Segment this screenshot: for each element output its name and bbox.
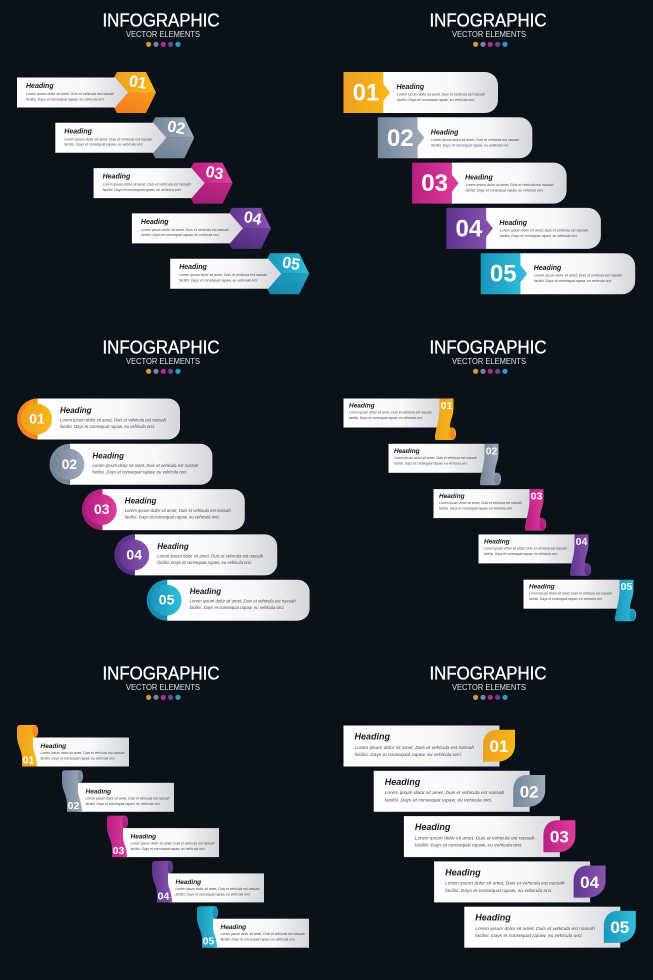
text — [60, 418, 167, 429]
step 04 — [434, 861, 606, 902]
text — [86, 796, 170, 806]
arrow block — [412, 163, 459, 204]
text: facilisi. Days et consequat rapaw, eu vehicula orci. — [103, 188, 182, 192]
text: Lorem ipsum dolor sit amet, Duis et vehicula est nassah — [475, 926, 595, 931]
ribbon — [107, 816, 128, 857]
card — [38, 398, 180, 440]
title: VECTOR ELEMENTS — [126, 29, 200, 39]
heading: Heading — [465, 175, 493, 182]
text: Lorem ipsum dolor sit amet, Duis et vehicula est nassah — [103, 183, 191, 187]
text — [445, 881, 565, 893]
text: Lorem ipsum dolor sit amet, Duis et vehicula est nassah — [176, 887, 260, 891]
card — [167, 580, 310, 621]
text: facilisi. Days et consequat rapaw, eu vehicula orci. — [60, 424, 155, 429]
ribbon — [480, 444, 501, 485]
step 01 — [17, 725, 129, 766]
card — [17, 78, 128, 108]
card — [132, 213, 243, 243]
text: Lorem ipsum dolor sit amet, Duis et vehicula est nassah — [60, 418, 167, 422]
number: 01 — [353, 80, 379, 106]
ribbon — [197, 906, 218, 948]
text: Lorem ipsum dolor sit amet, Duis et vehicula est nassah — [397, 92, 485, 96]
heading: Heading — [130, 834, 156, 841]
card — [417, 117, 532, 158]
text: Lorem ipsum dolor sit amet, Duis et vehicula est nassah — [529, 592, 612, 596]
title: VECTOR ELEMENTS — [452, 682, 526, 692]
heading: Heading — [349, 402, 375, 410]
text: Lorem ipsum dolor sit amet, Duis et vehicula est nassah — [354, 745, 474, 750]
step 05 — [524, 580, 636, 621]
card — [478, 534, 574, 563]
text: facilisi. Days et consequat rapaw, eu vehicula orci. — [500, 234, 578, 238]
text: Lorem ipsum dolor sit amet, Duis et vehicula est nassah — [431, 138, 519, 142]
number: 04 — [580, 873, 600, 892]
text: Lorem ipsum dolor sit amet, Duis et vehicula est nassah — [466, 183, 554, 187]
text: Lorem ipsum dolor sit amet, Duis et vehicula est nassah — [439, 501, 522, 505]
text: Lorem ipsum dolor sit amet, Duis et vehicula est nassah — [125, 508, 231, 513]
number: 01 — [29, 410, 45, 426]
text: Lorem ipsum dolor sit amet, Duis et vehicula est nassah — [130, 842, 214, 846]
text: Lorem ipsum dolor sit amet, Duis et vehicula est nassah — [484, 546, 567, 550]
text: Lorem ipsum dolor sit amet, Duis et vehicula est nassah — [349, 410, 432, 414]
card — [404, 816, 560, 857]
heading: Heading — [103, 174, 131, 181]
text: facilisi. Days et consequat rapaw, eu vehicula orci. — [534, 279, 612, 283]
text: facilisi. Days et consequat rapaw, eu vehicula orci. — [179, 278, 258, 282]
ribbon — [435, 398, 456, 440]
text: Lorem ipsum dolor sit amet, Duis et vehicula est nassah — [220, 932, 304, 936]
text: facilisi. Days et consequat rapaw, eu vehicula orci. — [40, 756, 116, 760]
title: INFOGRAPHIC — [102, 338, 220, 358]
leaf badge — [574, 866, 606, 898]
text: facilisi. Days et consequat rapaw, eu vehicula orci. — [431, 143, 509, 147]
text: Lorem ipsum dolor sit amet, Duis et vehicula est nassah — [500, 228, 588, 232]
text — [500, 228, 588, 238]
ribbon — [17, 725, 38, 766]
text — [439, 501, 522, 511]
text — [475, 926, 595, 938]
text — [26, 92, 114, 101]
step 03 — [404, 816, 575, 857]
text: Lorem ipsum dolor sit amet, Duis et vehicula est nassah — [179, 273, 267, 277]
text: Lorem ipsum dolor sit amet, Duis et vehicula est nassah — [40, 751, 124, 755]
hexagon badge — [191, 163, 233, 204]
title — [430, 338, 546, 374]
text — [484, 546, 567, 556]
step 05 — [464, 907, 636, 948]
outer circle — [17, 398, 58, 440]
title: VECTOR ELEMENTS — [126, 356, 200, 366]
card — [170, 259, 281, 289]
heading: Heading — [176, 879, 201, 886]
text — [529, 592, 612, 601]
text: facilisi. Days et consequat rapaw, eu vehicula orci. — [157, 560, 252, 565]
step 04 — [114, 534, 277, 576]
heading: Heading — [26, 83, 54, 90]
leaf badge — [513, 775, 545, 807]
heading: Heading — [141, 219, 169, 226]
text: facilisi. Days et consequat rapaw, eu vehicula orci. — [466, 189, 544, 193]
title: VECTOR ELEMENTS — [126, 682, 200, 692]
text: facilisi. Days et consequat rapaw, eu vehicula orci. — [349, 416, 423, 420]
number: 01 — [128, 73, 148, 93]
text: facilisi. Days et consequat rapaw, eu vehicula orci. — [141, 233, 220, 237]
hexagon badge — [152, 117, 194, 158]
text: facilisi. Days et consequat rapaw, eu vehicula orci. — [190, 605, 285, 610]
text: Lorem ipsum dolor sit amet, Duis et vehicula est nassah — [64, 137, 152, 141]
text: facilisi. Days et consequat rapaw, eu vehicula orci. — [397, 98, 475, 102]
step 05 — [170, 253, 309, 294]
card — [123, 828, 219, 857]
title: INFOGRAPHIC — [430, 338, 546, 358]
heading: Heading — [394, 448, 420, 455]
ribbon — [152, 861, 173, 902]
text: facilisi. Days et consequat rapaw, eu vehicula orci. — [529, 597, 603, 601]
arrow block — [378, 117, 424, 158]
heading: Heading — [439, 493, 465, 500]
number: 03 — [550, 828, 569, 847]
card — [434, 861, 590, 902]
heading: Heading — [396, 84, 425, 91]
inner disc — [86, 494, 117, 525]
text — [385, 790, 505, 802]
text — [130, 842, 214, 851]
step 02 — [50, 444, 212, 485]
card — [94, 168, 205, 198]
card — [78, 783, 174, 812]
text — [179, 273, 267, 282]
number: 03 — [421, 170, 448, 197]
text: Lorem ipsum dolor sit amet, Duis et vehicula est nassah — [534, 274, 622, 278]
card — [55, 123, 166, 153]
heading: Heading — [60, 406, 92, 415]
number: 03 — [204, 164, 225, 184]
text: Lorem ipsum dolor sit amet, Duis et vehicula est nassah — [86, 796, 170, 800]
card — [33, 738, 129, 766]
text — [92, 463, 199, 474]
card — [486, 208, 601, 249]
title: VECTOR ELEMENTS — [452, 356, 526, 366]
number: 03 — [113, 845, 124, 857]
hexagon badge — [267, 253, 309, 294]
heading: Heading — [190, 587, 221, 596]
outer circle — [114, 534, 156, 576]
card — [452, 163, 567, 204]
number: 05 — [281, 254, 301, 274]
step 04 — [152, 861, 264, 902]
step 02 — [55, 117, 194, 158]
card — [383, 72, 498, 113]
arrow block — [446, 208, 493, 249]
leaf badge — [604, 911, 636, 943]
text — [431, 138, 519, 147]
text: facilisi. Days et consequat rapaw, eu vehicula orci. — [220, 938, 296, 942]
number: 05 — [159, 592, 175, 608]
outer circle — [82, 489, 123, 530]
text — [220, 932, 304, 942]
ribbon — [615, 580, 636, 621]
step 01 — [344, 726, 515, 766]
panel: rounded cards with arrow blocks — [344, 10, 635, 294]
card — [135, 534, 277, 575]
card — [374, 771, 530, 812]
card — [168, 873, 264, 902]
ribbon — [62, 770, 83, 812]
inner disc — [151, 585, 182, 616]
heading: Heading — [157, 542, 189, 551]
text — [190, 599, 296, 610]
outer circle — [50, 444, 91, 485]
step 05 — [197, 906, 309, 948]
text: facilisi. Days et consequat rapaw, eu vehicula orci. — [125, 515, 220, 520]
text — [64, 137, 152, 147]
ribbon — [570, 534, 591, 576]
heading: Heading — [125, 497, 156, 506]
title: INFOGRAPHIC — [102, 10, 220, 30]
number: 02 — [62, 456, 77, 472]
step 05 — [147, 580, 310, 621]
text — [157, 553, 264, 565]
step 03 — [82, 489, 245, 530]
leaf badge — [483, 730, 515, 762]
text: facilisi. Days et consequat rapaw, eu vehicula orci. — [354, 752, 462, 757]
text: facilisi. Days et consequat rapaw, eu vehicula orci. — [394, 461, 468, 465]
step 04 — [446, 208, 601, 249]
text: facilisi. Days et consequat rapaw, eu vehicula orci. — [439, 507, 513, 511]
number: 01 — [23, 754, 34, 766]
heading: Heading — [64, 128, 93, 135]
number: 01 — [441, 400, 452, 412]
card — [464, 907, 620, 948]
ribbon — [525, 489, 546, 531]
text: facilisi. Days et consequat rapaw, eu vehicula orci. — [475, 933, 583, 938]
number: 04 — [456, 215, 483, 242]
text — [466, 183, 554, 193]
title: INFOGRAPHIC — [430, 10, 546, 30]
number: 02 — [486, 445, 497, 457]
heading: Heading — [86, 788, 111, 795]
title — [430, 664, 546, 700]
card — [102, 489, 245, 530]
number: 04 — [158, 890, 169, 902]
text: Lorem ipsum dolor sit amet, Duis et vehicula est nassah — [394, 456, 477, 460]
heading: Heading — [445, 867, 481, 877]
step 02 — [388, 444, 501, 485]
step 02 — [374, 771, 545, 812]
outer circle — [147, 580, 188, 621]
card — [434, 489, 530, 518]
number: 03 — [94, 501, 110, 517]
number: 02 — [166, 118, 186, 138]
text: facilisi. Days et consequat rapaw, eu vehicula orci. — [484, 552, 558, 556]
text: facilisi. Days et consequat rapaw, eu vehicula orci. — [445, 888, 553, 893]
number: 03 — [531, 491, 542, 503]
card — [344, 398, 440, 428]
step 03 — [94, 163, 233, 204]
card — [213, 919, 309, 948]
title — [102, 10, 220, 47]
step 02 — [378, 117, 532, 158]
step 03 — [107, 816, 219, 857]
step 05 — [481, 253, 635, 294]
heading: Heading — [484, 538, 510, 545]
panel: hexagon arrow steps — [17, 10, 309, 294]
heading: Heading — [40, 743, 66, 750]
text — [349, 410, 432, 420]
text — [397, 92, 485, 102]
step 04 — [132, 208, 271, 249]
heading: Heading — [385, 777, 421, 787]
heading: Heading — [431, 129, 459, 136]
title — [102, 338, 220, 374]
text — [394, 456, 477, 465]
arrow block — [481, 253, 527, 294]
heading: Heading — [354, 732, 391, 742]
heading: Heading — [92, 451, 124, 460]
heading: Heading — [534, 265, 562, 272]
title — [102, 664, 220, 700]
arrow block — [344, 72, 390, 113]
number: 05 — [490, 261, 517, 288]
text: Lorem ipsum dolor sit amet, Duis et vehicula est nassah — [385, 790, 505, 795]
number: 05 — [203, 936, 214, 948]
title: VECTOR ELEMENTS — [452, 29, 526, 39]
text — [40, 751, 124, 760]
heading: Heading — [499, 220, 528, 227]
title — [430, 10, 546, 47]
leaf badge — [543, 820, 575, 852]
number: 01 — [490, 737, 508, 756]
title: INFOGRAPHIC — [430, 664, 546, 684]
step 01 — [344, 398, 456, 440]
panel: cards with leaf badges — [344, 664, 636, 948]
text — [354, 745, 474, 757]
text: Lorem ipsum dolor sit amet, Duis et vehicula est nassah — [157, 553, 264, 558]
inner disc — [53, 449, 84, 480]
text: Lorem ipsum dolor sit amet, Duis et vehicula est nassah — [26, 92, 114, 96]
card — [388, 444, 484, 473]
number: 02 — [387, 125, 414, 152]
text: Lorem ipsum dolor sit amet, Duis et vehicula est nassah — [141, 228, 229, 232]
text: facilisi. Days et consequat rapaw, eu vehicula orci. — [176, 892, 250, 896]
number: 05 — [610, 918, 629, 937]
inner disc — [21, 404, 52, 434]
hexagon badge — [114, 72, 156, 113]
number: 04 — [126, 546, 142, 562]
panel: cards with bottom-curl ribbons — [344, 338, 636, 621]
text: facilisi. Days et consequat rapaw, eu vehicula orci. — [385, 797, 492, 802]
number: 02 — [68, 800, 79, 812]
text: facilisi. Days et consequat rapaw, eu vehicula orci. — [92, 469, 187, 474]
text: facilisi. Days et consequat rapaw, eu vehicula orci. — [64, 143, 143, 147]
card — [344, 726, 500, 766]
step 01 — [17, 72, 156, 113]
number: 04 — [242, 209, 263, 229]
step 03 — [434, 489, 546, 531]
panel: cards with top-curl ribbons — [17, 664, 309, 948]
text — [141, 228, 229, 237]
heading: Heading — [220, 924, 246, 931]
card — [70, 444, 212, 485]
card — [524, 580, 620, 609]
step 02 — [62, 770, 174, 812]
title: INFOGRAPHIC — [102, 664, 220, 684]
step 01 — [17, 398, 180, 440]
text: facilisi. Days et consequat rapaw, eu vehicula orci. — [415, 843, 522, 848]
text: facilisi. Days et consequat rapaw, eu vehicula orci. — [26, 97, 105, 101]
number: 05 — [621, 581, 632, 593]
number: 02 — [520, 782, 539, 801]
heading: Heading — [529, 584, 555, 591]
text — [176, 887, 260, 896]
text: Lorem ipsum dolor sit amet, Duis et vehicula est nassah — [415, 835, 535, 840]
text — [415, 835, 535, 848]
heading: Heading — [415, 822, 451, 832]
text: facilisi. Days et consequat rapaw, eu vehicula orci. — [86, 802, 160, 806]
card — [520, 253, 635, 294]
text: Lorem ipsum dolor sit amet, Duis et vehicula est nassah — [92, 463, 199, 468]
hexagon badge — [229, 208, 271, 249]
text: Lorem ipsum dolor sit amet, Duis et vehicula est nassah — [190, 599, 296, 604]
heading: Heading — [179, 264, 208, 271]
panel: circle badge cards — [17, 338, 310, 621]
step 03 — [412, 163, 567, 204]
inner disc — [118, 539, 149, 570]
heading: Heading — [475, 913, 511, 923]
text: Lorem ipsum dolor sit amet, Duis et vehicula est nassah — [445, 881, 565, 886]
step 04 — [478, 534, 591, 576]
number: 04 — [576, 536, 587, 548]
text — [534, 274, 622, 283]
text — [125, 508, 231, 520]
text: facilisi. Days et consequat rapaw, eu vehicula orci. — [130, 847, 206, 851]
step 01 — [344, 72, 498, 113]
text — [103, 183, 191, 192]
